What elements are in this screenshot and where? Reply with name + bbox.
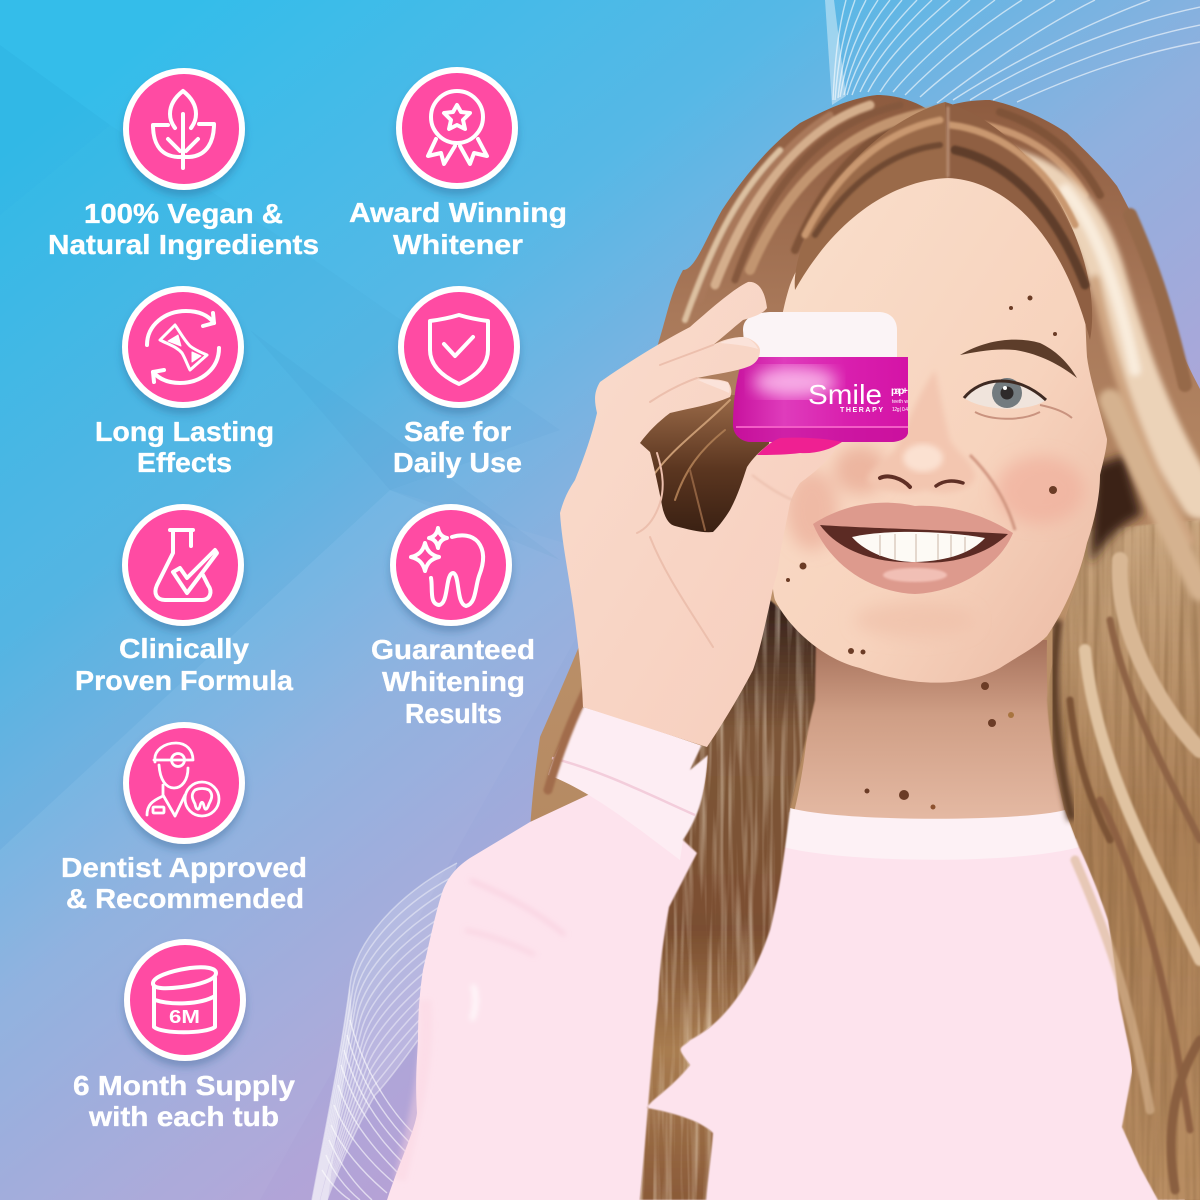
product jar: 12g | 0.4 [892,407,908,413]
cheek blush [786,446,1084,638]
hair around forehead left [795,102,948,290]
strands in finger gap [650,400,730,530]
label: Proven Formula [75,665,293,696]
label: Whitener [393,229,523,260]
label: 100% Vegan & [84,198,283,229]
label: with each tub [88,1101,279,1132]
badge [401,289,517,405]
right hair lock over sweater [1047,520,1200,1200]
benefit: clinically proven [75,507,293,696]
right lock strands [1047,520,1200,1200]
icon: tub [153,967,216,1032]
icon: dentist with tooth [147,743,219,816]
sweater collar [783,808,1079,860]
wave fan bottom left [312,863,457,1200]
hair back layer [530,95,1200,1200]
hair streaks on crown [805,108,1085,285]
benefit: vegan [48,71,319,260]
right eye [964,378,1072,419]
nose [868,370,975,493]
icon: flask with check [155,530,217,600]
icon: hourglass and arrows [147,311,219,383]
benefit: long lasting [95,289,274,478]
badge [399,70,515,186]
label: Dentist Approved [61,852,307,883]
sweater body [387,780,1185,1200]
wave lines top right [825,0,1200,105]
icon: sparkling tooth [411,528,483,606]
jar body [730,355,910,445]
hand [560,282,842,747]
label: Guaranteed [371,634,535,665]
product jar: THERAPY [840,407,883,414]
badge [125,289,241,405]
hair around forehead right [945,102,1092,340]
label: & Recommended [66,883,304,914]
label: 6 Month Supply [73,1070,295,1101]
badge [393,507,509,623]
label: Award Winning [349,197,567,228]
right eyebrow [960,340,1077,378]
fingernails [698,337,758,393]
left hair lock over sweater [640,600,816,1200]
badge [127,942,243,1058]
moles [786,296,1057,810]
product jar: teeth w [892,399,908,405]
dark patch beside right cheek [1090,455,1142,565]
icon: shield [430,315,488,384]
badge [126,725,242,841]
label: Effects [137,447,232,478]
benefit: six month supply [73,942,295,1132]
woman photo illustration [387,95,1200,1200]
blond highlight sweep [1000,165,1200,590]
smile [813,455,1015,594]
background facets [0,45,620,1200]
face [768,172,1107,683]
label: Natural Ingredients [48,229,319,260]
benefit: safe [393,289,522,478]
label: Results [405,698,502,729]
thumb crease [752,475,793,500]
badge [125,507,241,623]
icon: plant [153,91,214,168]
hair strands [548,105,1200,1190]
label: Safe for [404,416,511,447]
label: Clinically [119,633,249,664]
product jar [730,312,910,445]
benefit: guaranteed whitening [371,507,535,729]
badge [126,71,242,187]
neck [794,640,1065,827]
dark strands beside neck [1054,620,1072,820]
sweater shading [400,880,565,1180]
jar lid [743,312,897,358]
label: Whitening [382,666,525,697]
tub label: 6M [169,1007,200,1027]
jar reflection on thumb [757,438,842,455]
cuff fold [552,758,695,815]
left lock strands [640,600,816,1200]
sleeve cuff [548,707,708,860]
label: Long Lasting [95,416,274,447]
benefit: dentist approved [61,725,307,914]
finger creases [637,345,713,647]
hair visible between fingers and thumb [640,395,790,560]
jar logo: Smile [808,379,882,410]
label: Daily Use [393,447,522,478]
product jar: pap+ [891,386,908,397]
benefit: award [349,70,567,260]
icon: rosette [428,91,487,164]
